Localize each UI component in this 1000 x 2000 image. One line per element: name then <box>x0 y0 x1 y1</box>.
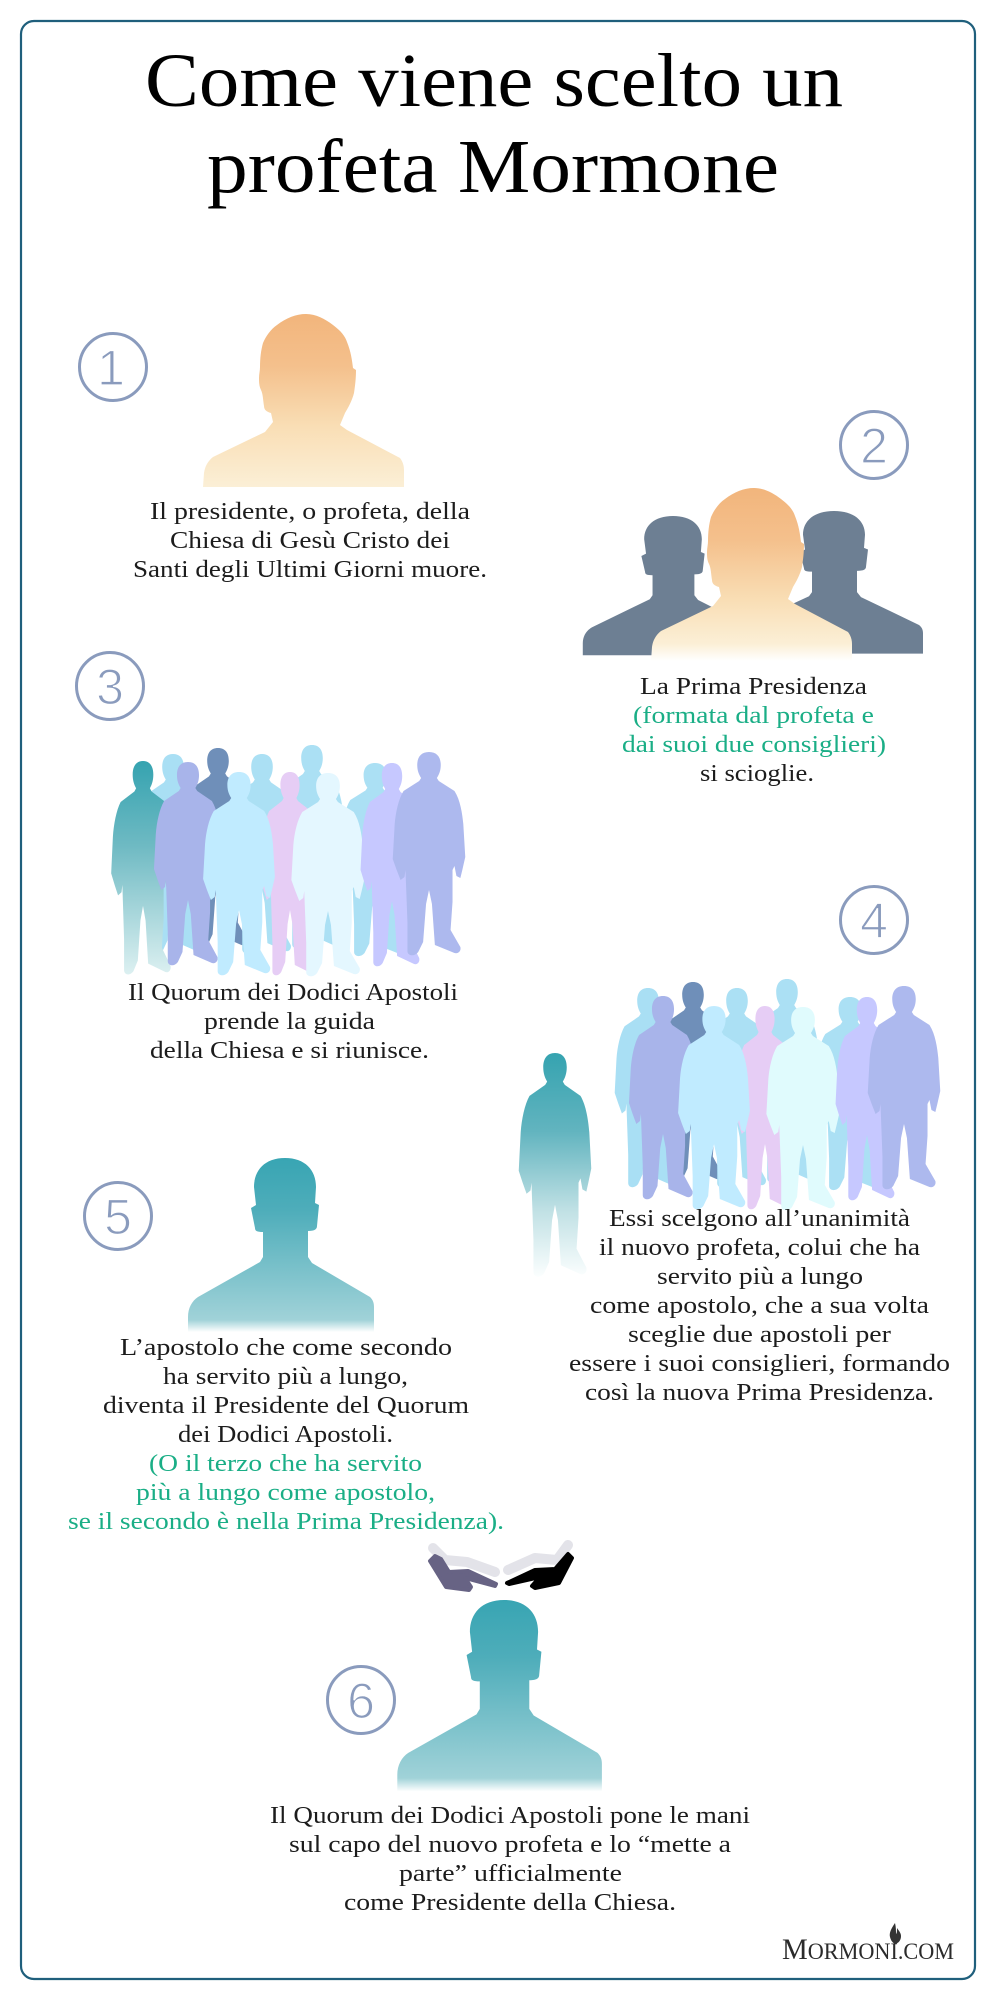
step 5 text: più a lungo come apostolo, <box>136 1479 435 1506</box>
step 5 text: ha servito più a lungo, <box>163 1363 408 1390</box>
step 4 text: così la nuova Prima Presidenza. <box>585 1379 934 1406</box>
step 1 text: Il presidente, o profeta, della <box>150 498 470 525</box>
step 4 number <box>840 886 908 954</box>
step 5 text: dei Dodici Apostoli. <box>178 1421 393 1448</box>
step 6 text: Il Quorum dei Dodici Apostoli pone le mani <box>270 1802 750 1829</box>
step 2 number <box>840 412 908 478</box>
step 1 text: Chiesa di Gesù Cristo dei <box>170 527 450 554</box>
step 3 text: prende la guida <box>204 1008 375 1035</box>
step 6 text <box>270 1802 750 1916</box>
step 2 text: La Prima Presidenza <box>640 673 867 700</box>
step 1 number <box>80 334 146 400</box>
step 5 text: diventa il Presidente del Quorum <box>103 1392 469 1419</box>
icon: prophet silhouette <box>203 314 404 487</box>
step 5 text: (O il terzo che ha servito <box>149 1450 422 1477</box>
step 2 text <box>622 673 886 787</box>
step 5 text: L’apostolo che come secondo <box>120 1334 452 1361</box>
step 6 number: 6 <box>347 1673 375 1729</box>
icon: new prophet bust <box>397 1600 602 1791</box>
step 2 text: (formata dal profeta e <box>633 702 874 729</box>
step 6 text: parte” ufficialmente <box>399 1860 622 1887</box>
step 1 text: Santi degli Ultimi Giorni muore. <box>133 556 487 583</box>
icon: hands laid on head <box>430 1545 572 1590</box>
step 6 text: come Presidente della Chiesa. <box>344 1889 676 1916</box>
logo: Mormoni.com: MORMONI.COM <box>782 1933 954 1966</box>
step 4 text: sceglie due apostoli per <box>628 1321 891 1348</box>
title <box>145 39 843 209</box>
step 3 number <box>76 652 144 720</box>
step 4 text: essere i suoi consiglieri, formando <box>569 1350 950 1377</box>
step 6 number <box>328 1666 394 1734</box>
step 2 text: si scioglie. <box>700 760 814 787</box>
step 4 number: 4 <box>860 893 888 949</box>
step 3 text <box>128 979 458 1064</box>
step 4 text: come apostolo, che a sua volta <box>590 1292 929 1319</box>
icon: senior apostle standing figure <box>519 1053 591 1277</box>
step 1 text <box>133 498 487 583</box>
step 3 text: Il Quorum dei Dodici Apostoli <box>128 979 458 1006</box>
step 4 text: servito più a lungo <box>657 1263 863 1290</box>
title: profeta Mormone <box>207 125 779 209</box>
step 5 text <box>68 1334 504 1535</box>
icon: senior apostle bust <box>188 1158 374 1332</box>
title: Come viene scelto un <box>145 39 843 123</box>
step 4 text <box>569 1205 950 1406</box>
step 4 text: Essi scelgono all’unanimità <box>609 1205 910 1232</box>
step 1 number: 1 <box>97 340 125 396</box>
icon: quorum of twelve group <box>111 745 465 976</box>
step 6 text: sul capo del nuovo profeta e lo “mette a <box>289 1831 731 1858</box>
step 5 text: se il secondo è nella Prima Presidenza). <box>68 1508 504 1535</box>
step 2 text: dai suoi due consiglieri) <box>622 731 886 758</box>
step 3 text: della Chiesa e si riunisce. <box>150 1037 429 1064</box>
step 5 number: 5 <box>104 1189 132 1245</box>
icon: apostles group without senior apostle <box>615 979 940 1210</box>
step 5 number <box>84 1182 152 1250</box>
step 4 text: il nuovo profeta, colui che ha <box>599 1234 920 1261</box>
step 3 number: 3 <box>96 659 124 715</box>
step 2 number: 2 <box>860 418 888 474</box>
icon: first presidency silhouettes <box>583 488 923 661</box>
